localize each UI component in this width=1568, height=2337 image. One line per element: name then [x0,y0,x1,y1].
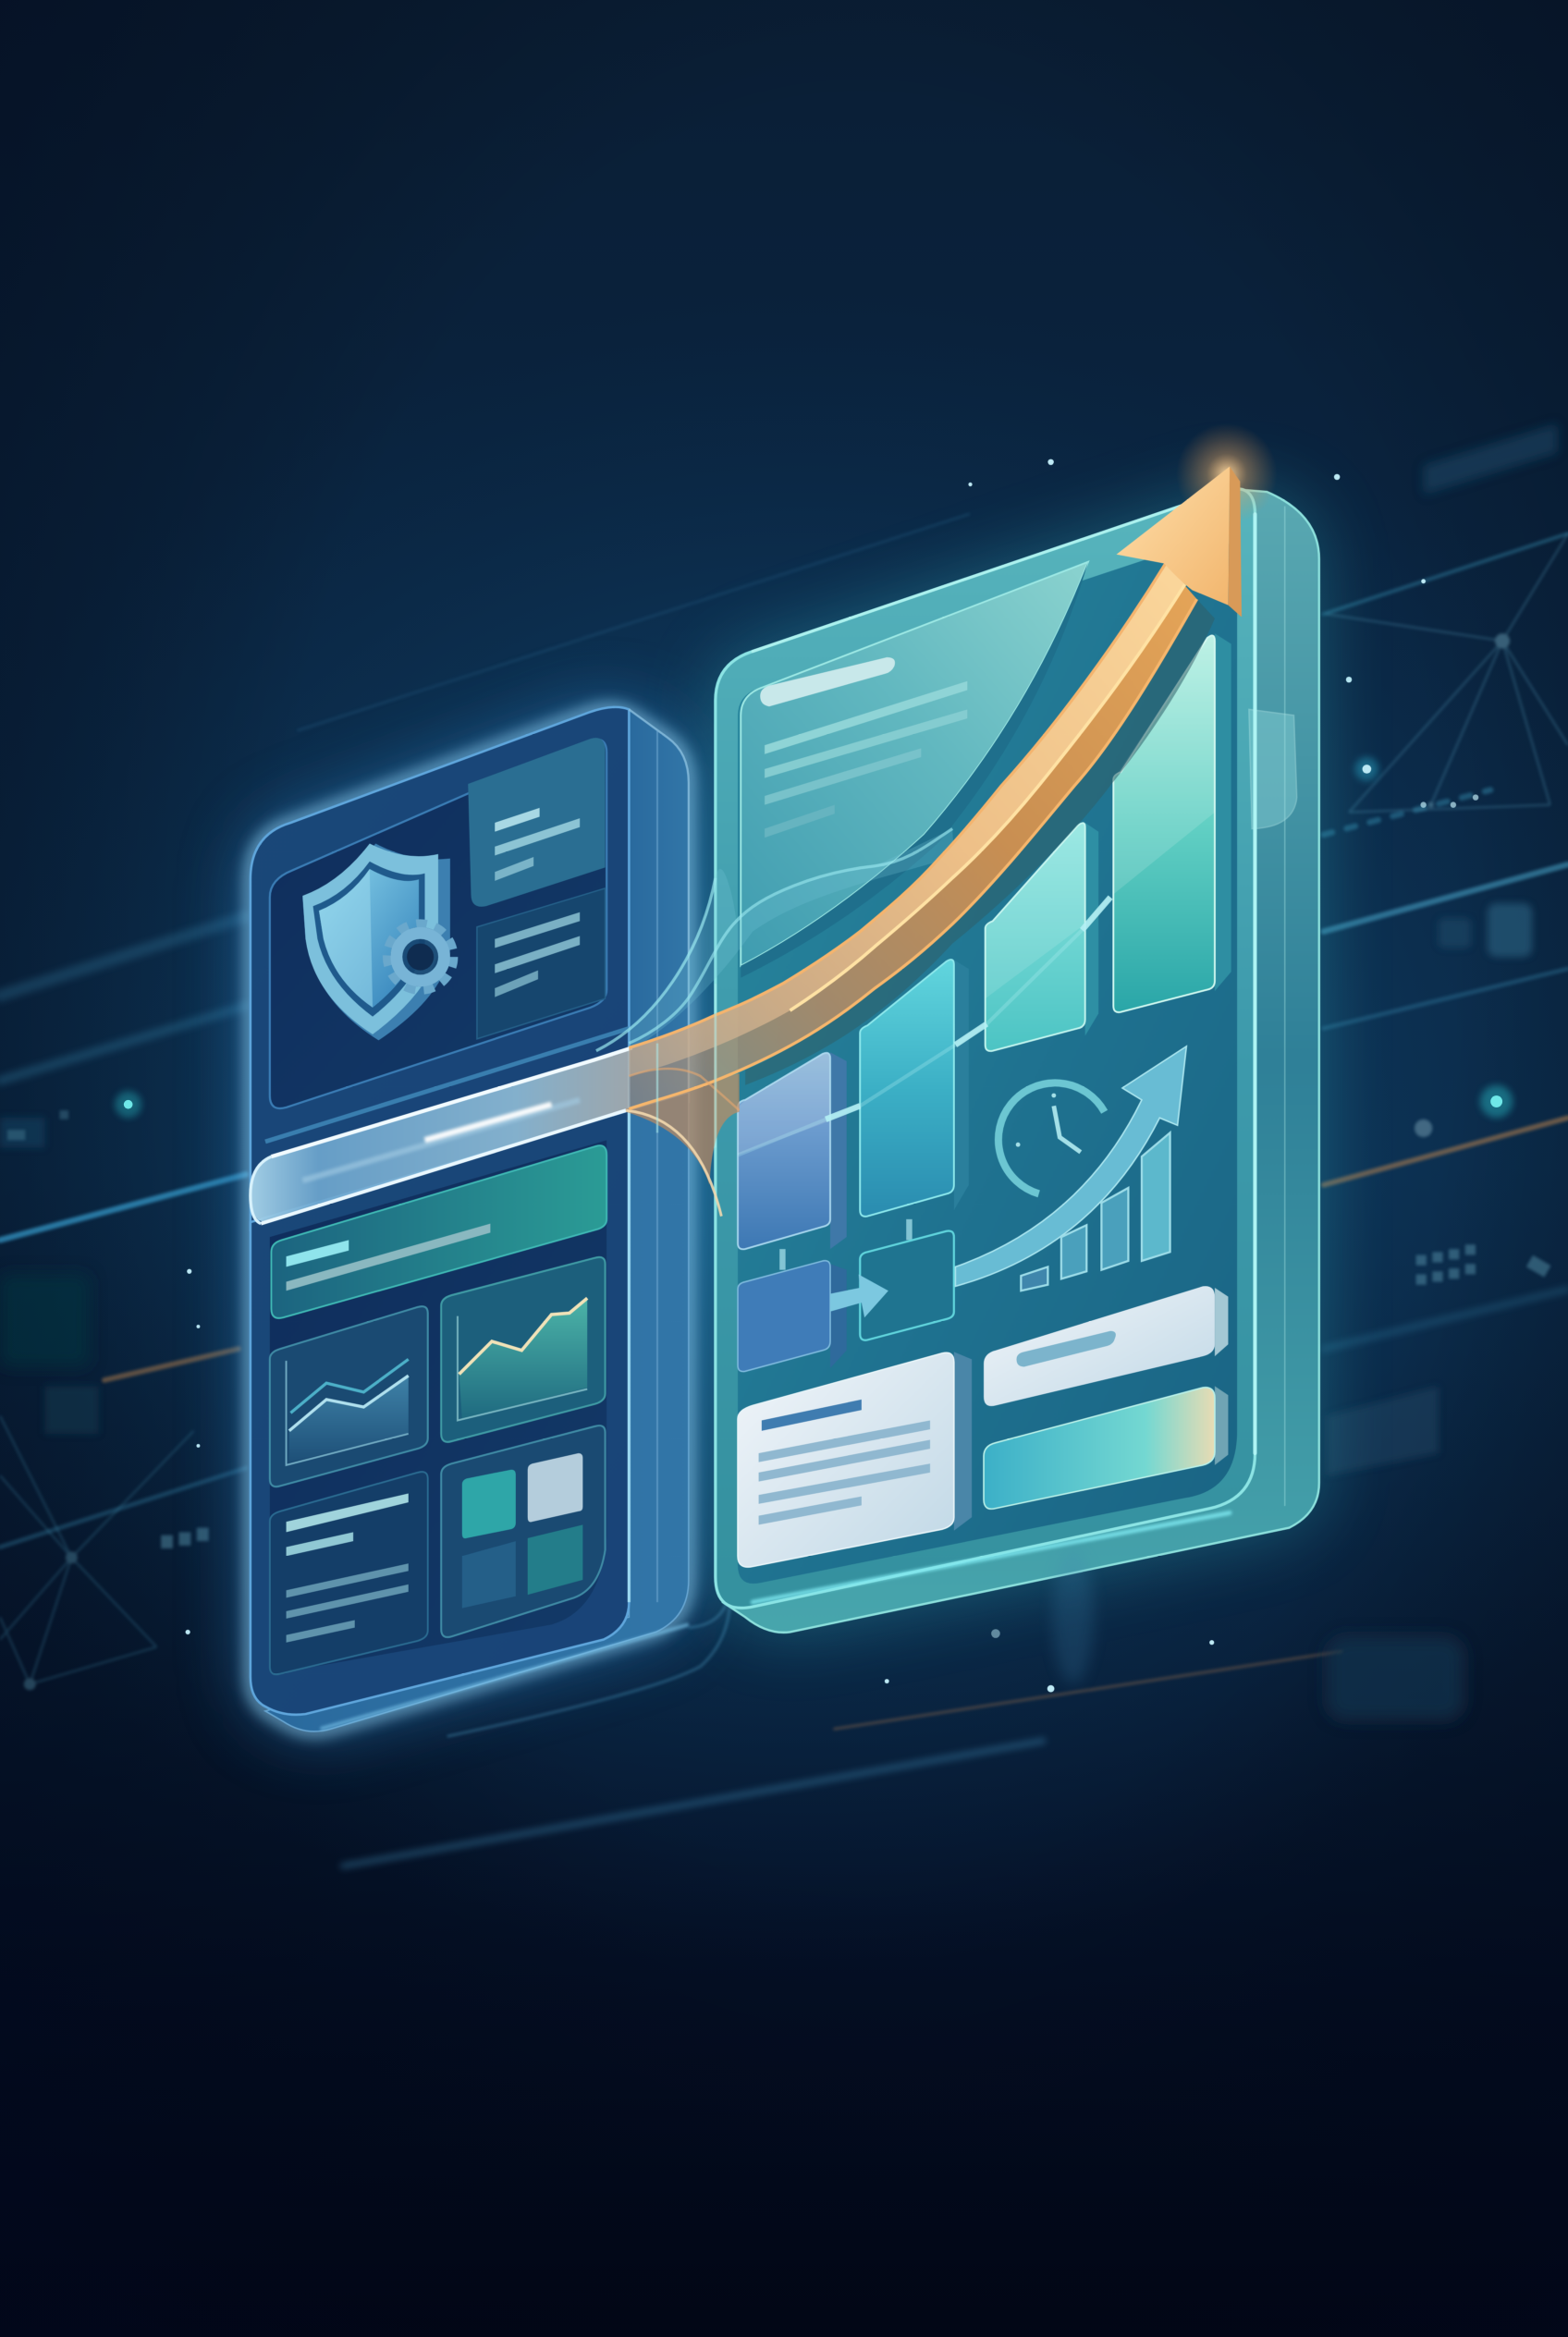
mini bar chart [1021,1132,1170,1291]
left panel: lower body [251,1093,730,1736]
glowing particles [115,459,1513,1693]
wisp: teal ribbon [596,828,954,1051]
white bar: right [984,1286,1228,1406]
left panel: upper screen [270,740,606,1108]
icon: shield with gear [302,844,453,1040]
teal bar: right [984,1386,1228,1509]
line chart card: blue [270,1306,428,1487]
right panel: inner screen [738,540,1237,1584]
bar 4 [1113,633,1231,1012]
growth arrow: flare line [626,1110,721,1217]
bar 1 [738,1052,847,1249]
left panel: glow outline [251,709,689,1731]
growth arrow: head [1117,467,1242,617]
glow behind right panel [716,489,1319,1633]
bar 2 [860,960,969,1217]
growth arrow: shaft shadow [745,599,1215,1085]
right panel: side body [723,489,1319,1633]
line chart card: teal [441,1257,606,1442]
left panel [251,707,730,1736]
left panel: frame lower edge [265,1028,629,1142]
growth arrow: edge and highlight lines [629,563,1197,1110]
sub-panel: lower text card [477,888,606,1039]
flow: growth arrow [955,1046,1186,1286]
white card: left [738,1352,972,1567]
band joining the panels [251,1047,632,1224]
tile card [441,1425,606,1637]
flow: arrow between nodes [830,1274,888,1317]
flow: teal node [860,1230,954,1340]
glow behind left panel [251,709,689,1731]
right panel [716,489,1319,1633]
background light streaks [0,514,1568,1866]
foreground haze at bottom [1052,1550,1094,1684]
left panel: upper body [251,707,689,1230]
growth arrow [626,423,1278,1217]
flow: blue node [830,1264,847,1368]
bar connector light [738,898,1110,1155]
glass text panel [741,562,1088,978]
small square grids [7,1110,1551,1548]
growth arrow: ribbon shaft dark [629,563,1197,1109]
growth arrow: panel edges over ribbon [657,984,716,1147]
growth arrow: membrane under ribbon [626,1073,740,1185]
growth arrow: ribbon shaft light [629,563,1185,1076]
side tab [1249,709,1297,828]
banner card [271,1145,606,1318]
text card [270,1472,428,1674]
network graph: left [0,1416,194,1690]
right panel: front frame [716,489,1255,1608]
growth arrow: sun glow at tip [1176,423,1278,525]
icon: clock [998,1083,1105,1193]
bar 3 [986,823,1098,1051]
sub-panel: upper text card [468,738,606,907]
icon: gear [387,924,453,990]
network graph: right [1327,533,1568,813]
right panel: bright edges [753,492,1285,1602]
flow diagram [738,1046,1186,1372]
blurred background blocks [0,423,1558,1720]
